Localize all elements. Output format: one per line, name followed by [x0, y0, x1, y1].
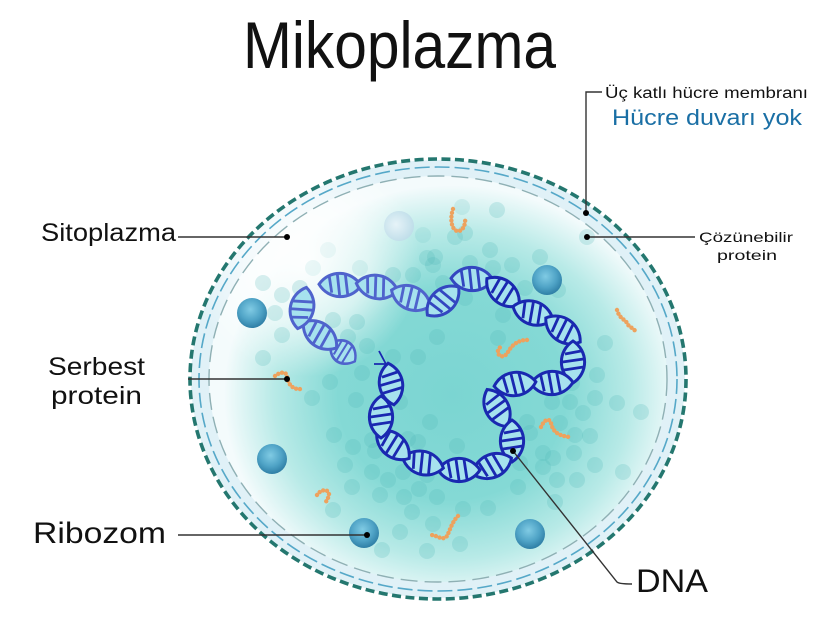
free proteins: [275, 209, 637, 538]
ribosomes: [237, 211, 562, 549]
leader lines: [178, 92, 695, 584]
label: membrane: Üç katlı hücre membranı: [605, 84, 808, 102]
title: Mikoplazma: [243, 8, 556, 82]
label: no cell wall: Hücre duvarı yok: [612, 105, 803, 130]
DNA double helix: [286, 267, 587, 485]
soluble protein dots: [255, 199, 649, 559]
label: Serbest protein: [48, 353, 145, 410]
cell body: [185, 159, 686, 599]
label: DNA: DNA: [636, 563, 709, 599]
label: Serbest protein: protein: [51, 382, 142, 410]
label: soluble protein: [699, 229, 793, 263]
label: Serbest protein: Serbest: [48, 353, 145, 381]
label: soluble protein: protein: [717, 247, 777, 263]
label: Ribozom: Ribozom: [33, 517, 166, 550]
label: soluble protein: Çözünebilir: [699, 229, 793, 245]
membrane: three dashed layers: [190, 159, 686, 599]
label: Sitoplazma: Sitoplazma: [41, 219, 176, 247]
leader dots: [284, 210, 590, 538]
